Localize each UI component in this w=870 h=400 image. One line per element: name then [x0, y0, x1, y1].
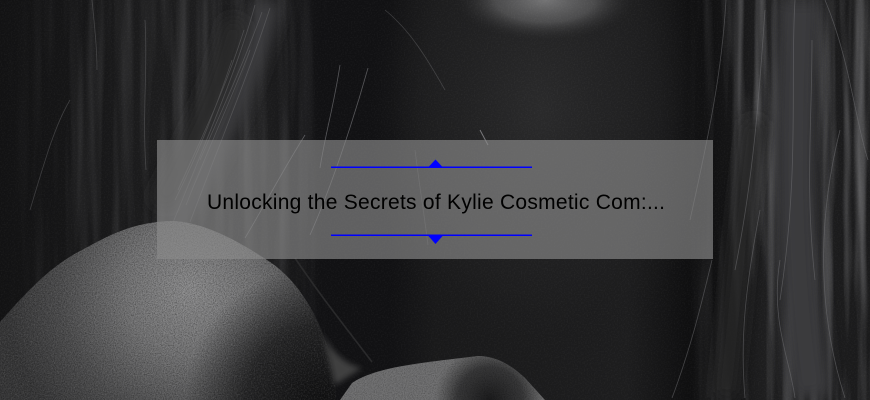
panel background: [157, 140, 713, 259]
shoulder: [0, 215, 372, 400]
hand: [340, 356, 545, 400]
hair: left strands: [30, 0, 488, 245]
top divider with up arrow: [331, 160, 532, 168]
hair: right strands: [672, 0, 868, 398]
bottom divider with down arrow: [331, 234, 532, 244]
title text: Unlocking the Secrets of Kylie Cosmetic Com:...: [207, 191, 665, 214]
